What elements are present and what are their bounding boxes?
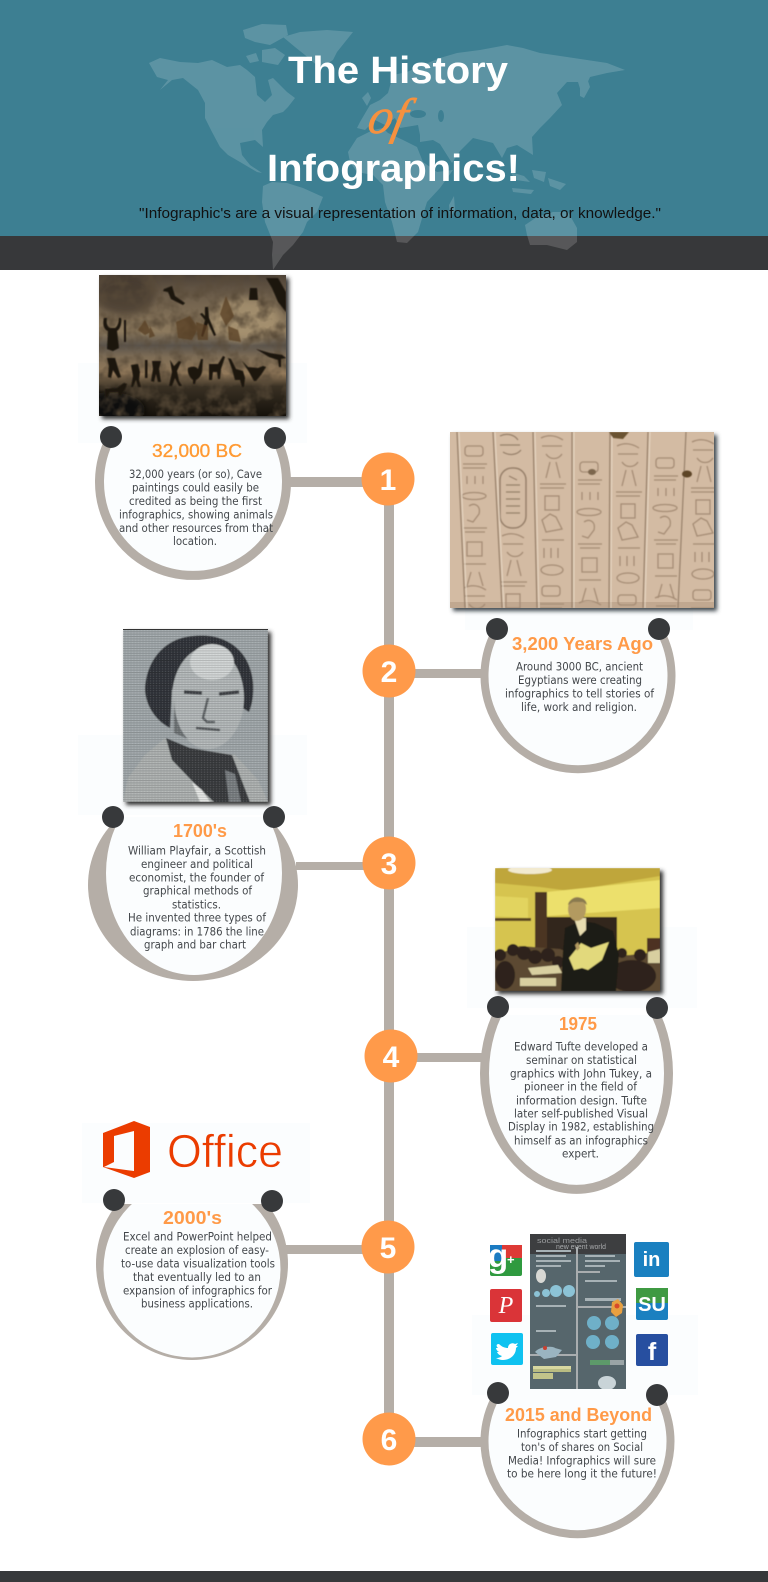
connector	[416, 1053, 486, 1062]
number badge 4	[364, 1030, 418, 1082]
title: Infographics!	[267, 148, 520, 190]
panel: 2015 and Beyond	[412, 1234, 698, 1534]
text: graphics with John Tukey, a	[510, 1066, 652, 1080]
icon: LinkedIn	[634, 1242, 669, 1277]
text: engineer and political	[141, 857, 253, 871]
heading: 3,200 Years Ago	[512, 634, 653, 654]
number badge 6: 6	[381, 1424, 397, 1457]
icon: StumbleUpon: SU	[638, 1294, 666, 1316]
text: William Playfair, a Scottish	[128, 844, 266, 858]
pins	[100, 426, 286, 449]
panel: 1700's	[78, 629, 366, 981]
Office wordmark: Office	[167, 1125, 283, 1177]
text: economist, the founder of	[129, 870, 265, 884]
text: pioneer in the field of	[524, 1080, 638, 1094]
heading: 1700's	[173, 821, 227, 841]
icon: Google+: +	[507, 1252, 515, 1267]
number badge 3	[362, 836, 416, 890]
text: to be here long it the future!	[507, 1466, 657, 1480]
number badge 6	[362, 1412, 416, 1466]
ring	[100, 437, 286, 575]
text: location.	[173, 534, 217, 548]
number badge 5	[362, 1220, 414, 1274]
connector	[412, 1437, 482, 1447]
header band	[0, 0, 768, 236]
pins	[487, 996, 668, 1019]
connector	[288, 477, 364, 487]
text: seminar on statistical	[526, 1053, 637, 1067]
panel: 32,000 BC	[75, 275, 364, 575]
text: life, work and religion.	[521, 700, 637, 714]
icon: LinkedIn: in	[643, 1249, 660, 1271]
image: hieroglyphs	[449, 431, 721, 615]
text: Egyptians were creating	[518, 673, 642, 687]
text: business applications.	[141, 1296, 253, 1310]
footer band	[0, 1571, 768, 1582]
connector	[414, 669, 482, 678]
text: Display in 1982, establishing	[508, 1120, 654, 1134]
text: statistics.	[172, 898, 221, 912]
text	[508, 1040, 654, 1160]
text: He invented three types of	[128, 910, 267, 924]
text: paintings could easily be	[132, 480, 259, 494]
text	[121, 1230, 275, 1310]
image: Edward Tufte seminar	[494, 867, 667, 998]
icon: Google+: g	[488, 1237, 508, 1274]
text: information design. Tufte	[516, 1094, 647, 1108]
text: Around 3000 BC, ancient	[516, 660, 643, 674]
text: graphical methods of	[143, 884, 253, 898]
text: graph and bar chart	[144, 938, 246, 952]
icon: Facebook: f	[648, 1338, 657, 1366]
ring	[484, 1015, 669, 1189]
title	[267, 50, 520, 190]
text: ton's of shares on Social	[521, 1440, 643, 1454]
text: Edward Tufte developed a	[514, 1040, 648, 1054]
connector	[286, 1245, 364, 1254]
image: social media infographic: social media	[537, 1238, 587, 1245]
number badge 5: 5	[380, 1232, 396, 1265]
image: William Playfair portrait	[123, 629, 271, 805]
number badge 1	[362, 452, 414, 506]
icon: Twitter	[491, 1333, 523, 1365]
text: that eventually led to an	[133, 1270, 261, 1284]
pins	[487, 1382, 668, 1406]
text: infographics to tell stories of	[505, 686, 655, 700]
text: create an explosion of easy-	[125, 1243, 269, 1257]
text: Excel and PowerPoint helped	[123, 1230, 272, 1244]
icon: Facebook	[636, 1334, 668, 1366]
icon: Office logo	[103, 1121, 150, 1178]
text	[505, 660, 655, 714]
text: 32,000 years (or so), Cave	[129, 467, 262, 481]
ring	[484, 1393, 670, 1534]
pins	[486, 618, 670, 640]
image: social media infographic	[530, 1234, 626, 1390]
panel: 2000's	[82, 1121, 364, 1360]
text: diagrams: in 1786 the line	[130, 924, 264, 938]
dark header strip	[0, 236, 768, 270]
world map	[149, 24, 625, 270]
pins	[102, 806, 285, 828]
icon: StumbleUpon	[636, 1288, 668, 1320]
number badge 2	[362, 644, 416, 698]
icon: Google+	[488, 1237, 522, 1276]
text: expansion of infographics for	[123, 1284, 272, 1298]
heading: 32,000 BC	[152, 441, 242, 461]
title: The History	[288, 50, 508, 92]
text: expert.	[562, 1146, 599, 1160]
heading: 2000's	[163, 1208, 222, 1228]
title: of	[364, 88, 419, 144]
text	[507, 1426, 657, 1480]
connector	[296, 862, 366, 870]
text: Media! Infographics will sure	[508, 1454, 656, 1468]
icon: Pinterest	[490, 1289, 522, 1322]
number badge 1: 1	[380, 464, 396, 497]
text: credited as being the first	[129, 494, 262, 508]
image: social media infographic: new event world	[556, 1244, 606, 1251]
crescent ring	[96, 1204, 288, 1360]
number badge 2: 2	[381, 656, 397, 689]
text: and other resources from that	[119, 521, 273, 535]
ring	[485, 629, 671, 769]
text	[119, 467, 273, 548]
text	[128, 844, 267, 952]
panel: 1975	[416, 866, 700, 1189]
heading: 1975	[559, 1014, 597, 1034]
image: cave paintings	[98, 274, 293, 423]
text: later self-published Visual	[514, 1106, 648, 1120]
crescent ring	[88, 827, 298, 981]
number badge 3: 3	[381, 848, 397, 881]
timeline spine	[384, 479, 394, 1439]
heading: 2015 and Beyond	[505, 1405, 652, 1425]
text: himself as an infographics	[514, 1134, 648, 1148]
text: Infographics start getting	[517, 1426, 647, 1440]
number badge 4: 4	[383, 1041, 400, 1074]
pins	[103, 1189, 283, 1212]
panel: 3,200 Years Ago	[414, 432, 717, 769]
text: infographics, showing animals	[119, 508, 273, 522]
text: to-use data visualization tools	[121, 1256, 275, 1270]
subtitle quote: "Infographic's are a visual representation of information, data, or knowledge."	[139, 205, 661, 222]
icon: Pinterest: P	[498, 1293, 514, 1319]
